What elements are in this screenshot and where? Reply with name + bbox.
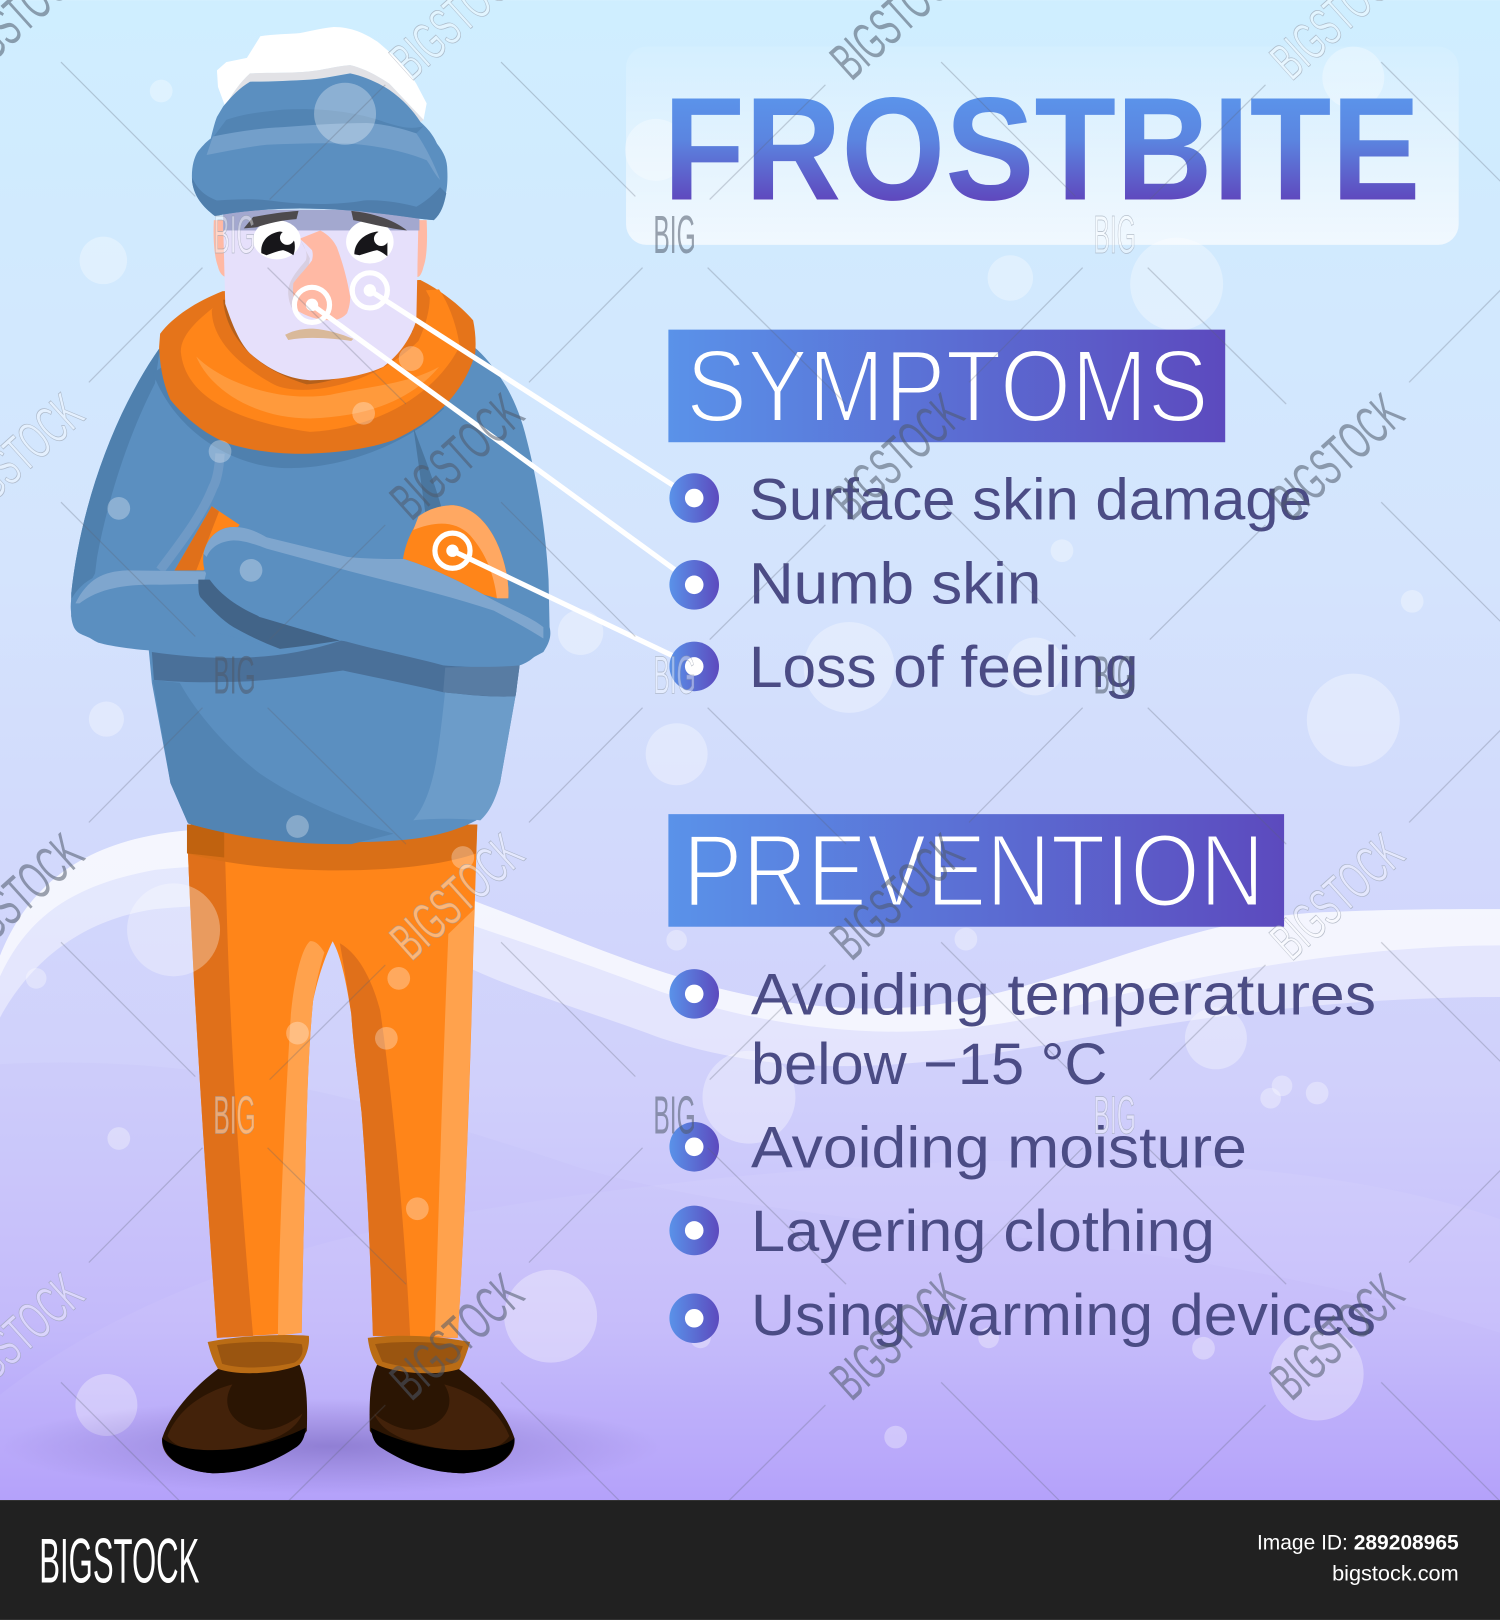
watermarks: BIGSTOCK: [1259, 1263, 1415, 1411]
heading: symptoms: SYMPTOMS: [686, 328, 1209, 444]
hat: [192, 27, 447, 220]
watermarks: BIG: [213, 1085, 256, 1145]
translucent bubbles over figure: [107, 83, 474, 1220]
watermarks: BIG: [213, 645, 256, 705]
snow hills: [0, 1063, 1500, 1500]
symptoms list: [669, 468, 1312, 700]
watermarks: BIG: [653, 645, 696, 705]
face: [223, 222, 418, 380]
prevention list: [669, 963, 1376, 1348]
watermarks: BIGSTOCK: [819, 1263, 975, 1411]
watermarks: BIGSTOCK: [819, 383, 975, 531]
trousers: [187, 824, 477, 1338]
figure: man in winter clothes: [0, 27, 661, 1494]
callout line: surface skin damage: [352, 273, 674, 486]
footer bar: [0, 1500, 1500, 1620]
watermarks: BIGSTOCK: [379, 1263, 535, 1411]
heading: prevention: PREVENTION: [683, 812, 1264, 928]
left hand: [175, 506, 240, 570]
right hand: [403, 505, 508, 598]
watermarks: BIG: [653, 205, 696, 265]
callout line: numb skin: [294, 287, 676, 570]
watermarks: BIGSTOCK: [379, 823, 535, 971]
watermarks: BIGSTOCK: [379, 383, 535, 531]
watermarks: BIG: [213, 205, 256, 265]
crossed arms: [71, 527, 548, 667]
callout line: loss of feeling: [435, 533, 676, 657]
item: loss of feeling: Loss of feeling: [749, 635, 1138, 700]
item: layering clothing: Layering clothing: [751, 1199, 1215, 1264]
ears: [214, 220, 427, 277]
watermarks: BIG: [1093, 645, 1136, 705]
eyes: [253, 220, 394, 264]
item: avoiding temperatures: below −15 °C: [751, 1032, 1107, 1097]
left boot: [162, 1365, 307, 1473]
forehead band: [223, 210, 419, 230]
nose: [288, 230, 350, 320]
watermarks: BIGSTOCK: [819, 823, 975, 971]
item: surface skin damage: Surface skin damage: [749, 468, 1312, 533]
item: avoiding temperatures: Avoiding temperatures: [751, 963, 1376, 1028]
eyebrows: [244, 211, 407, 230]
watermarks: BIG: [1093, 205, 1136, 265]
mouth: [285, 329, 353, 341]
jacket: [71, 346, 550, 844]
item: using warming devices: Using warming devices: [751, 1283, 1376, 1348]
image id: Image ID: 289208965: [1257, 1532, 1459, 1555]
watermarks: BIG: [653, 1085, 696, 1145]
item: numb skin: Numb skin: [749, 551, 1041, 616]
watermarks: BIGSTOCK: [1259, 823, 1415, 971]
right boot: [370, 1365, 515, 1473]
title: FROSTBITE: [663, 67, 1420, 231]
item: avoiding moisture: Avoiding moisture: [751, 1115, 1247, 1180]
item: avoiding temperatures: [669, 963, 1376, 1097]
website: bigstock.com: [1332, 1561, 1459, 1586]
ground shadow: [0, 1399, 661, 1494]
title panel: [626, 47, 1459, 245]
scarf: [159, 280, 476, 454]
watermarks: BIG: [1093, 1085, 1136, 1145]
snow wave band: [0, 829, 1500, 1066]
footer bar: BIGSTOCK: [39, 1527, 199, 1597]
trouser cuffs: [208, 1335, 470, 1373]
watermarks: BIGSTOCK: [1259, 383, 1415, 531]
